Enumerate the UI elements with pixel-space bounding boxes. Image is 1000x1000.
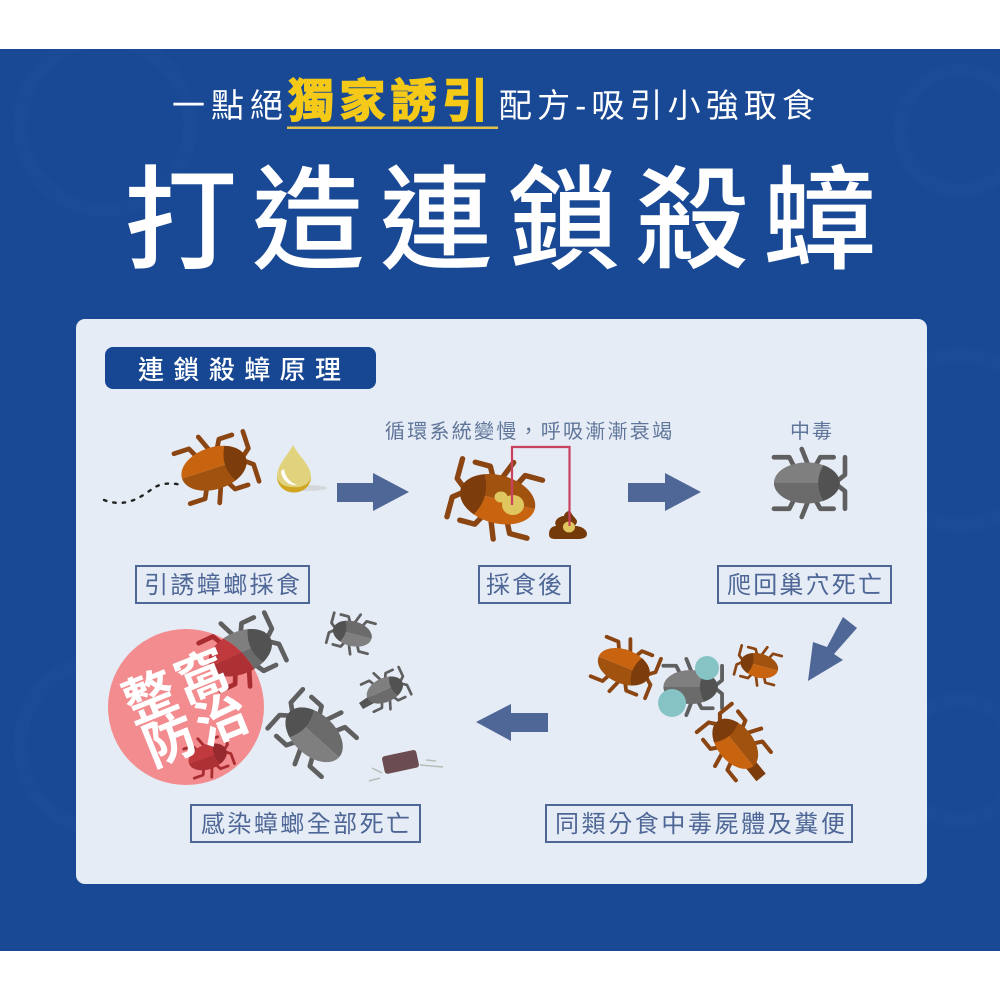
icon: small gray cockroach right — [359, 663, 413, 716]
icon: small orange cockroach — [733, 641, 783, 690]
icon: orange cockroach left — [588, 631, 664, 705]
icon: gray cockroach behind badge — [195, 605, 290, 698]
panel heading — [105, 347, 376, 389]
intro text left: 一點絕 — [172, 87, 283, 124]
bait spots — [658, 656, 719, 717]
icon: poisoned cockroach — [774, 449, 845, 517]
panel: chain-kill principle — [76, 319, 927, 884]
step 4: cannibalising the poisoned corpse — [588, 631, 783, 785]
icon: large gray cockroach — [262, 683, 362, 783]
faint watermark — [20, 40, 1000, 830]
caption: circulation slows: 循環系統變慢，呼吸漸漸衰竭 — [385, 420, 672, 443]
caption: poisoned: 中毒 — [790, 420, 832, 443]
main title: 打造連鎖殺蟑 — [124, 158, 876, 284]
arrow 3 — [808, 617, 857, 681]
icon: droppings — [549, 510, 587, 539]
label: lured to feed — [136, 566, 309, 603]
step 5: colony dead — [108, 605, 443, 785]
icon: debris — [369, 749, 443, 781]
bait blobs — [494, 492, 524, 515]
label: all infected die: 感染蟑螂全部死亡 — [201, 811, 410, 838]
icon: orange cockroach with egg case — [691, 699, 776, 785]
icon: cockroach with bait inside — [445, 450, 545, 547]
step 2: after feeding — [445, 447, 587, 547]
icon: gray corpse — [663, 659, 722, 715]
badge text: 防治 — [135, 684, 257, 778]
icon: bait drop — [277, 445, 327, 492]
label: shared feeding: 同類分食中毒屍體及糞便 — [555, 811, 845, 838]
arrow 1 — [337, 473, 409, 511]
highlighted words: 獨家誘引 — [288, 75, 488, 127]
label: crawl back and die: 爬回巢穴死亡 — [727, 572, 882, 599]
yellow underline — [287, 126, 498, 129]
label: shared feeding — [546, 805, 852, 842]
panel heading: 連鎖殺蟑原理 — [138, 355, 341, 385]
label: after feeding — [479, 566, 570, 603]
badge text: 整窩 — [115, 641, 237, 735]
dotted trail — [104, 484, 182, 503]
label: all infected die — [191, 805, 420, 842]
badge text — [115, 641, 257, 778]
intro text right: 配方-吸引小強取食 — [499, 87, 815, 124]
label: lured to feed: 引誘蟑螂採食 — [144, 572, 300, 599]
arrow 2 — [628, 473, 701, 511]
badge: whole-nest control — [108, 629, 264, 785]
label: crawl back and die — [718, 566, 891, 603]
icon: cockroach — [171, 423, 262, 512]
pink connector line — [512, 447, 570, 526]
arrow 4 — [476, 704, 548, 741]
step 1: lured cockroach with bait — [104, 423, 327, 512]
label: after feeding: 採食後 — [486, 572, 562, 599]
headline: intro line — [172, 75, 815, 129]
cockroach seen through badge — [182, 634, 254, 780]
icon: small gray cockroach top — [325, 608, 377, 659]
